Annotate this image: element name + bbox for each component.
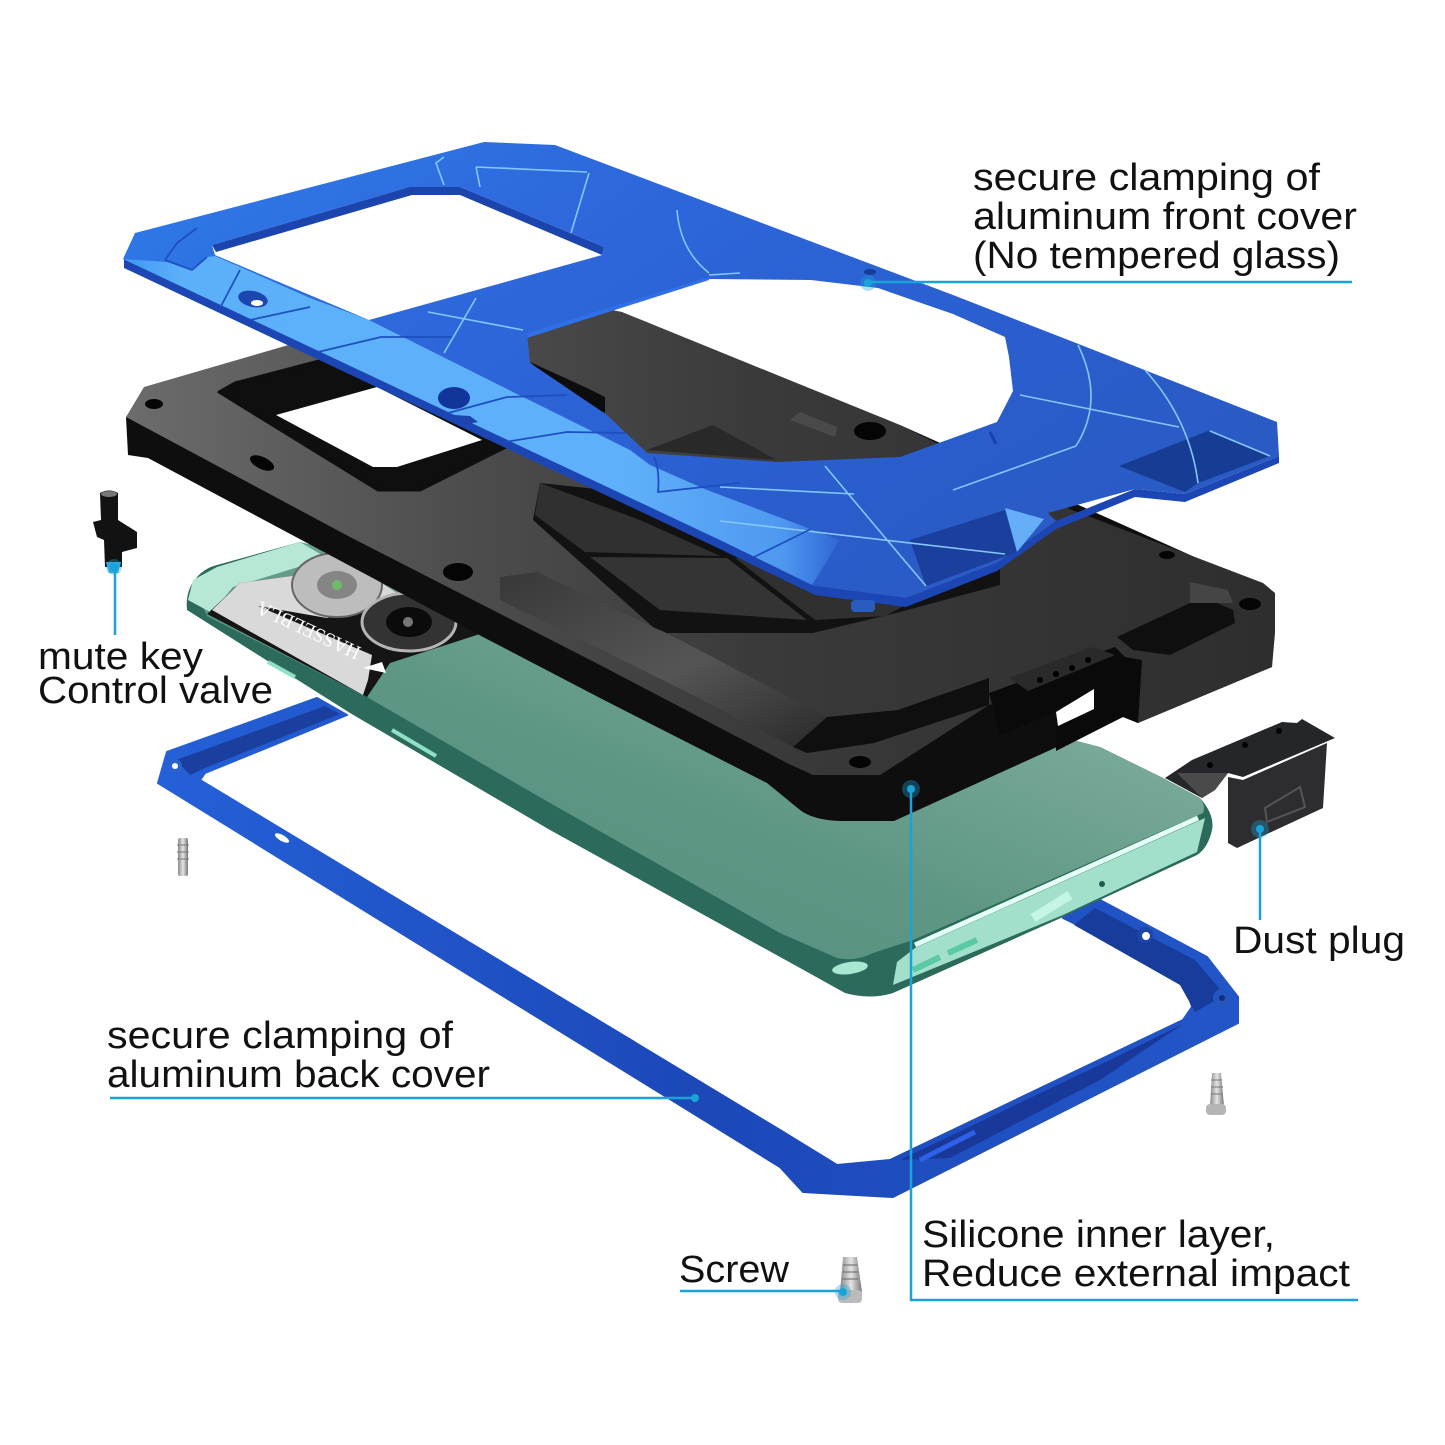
back aluminum frame bbox=[158, 698, 1238, 1197]
cover holes bbox=[237, 269, 996, 612]
lens 1 bbox=[292, 553, 382, 617]
screw left bbox=[177, 838, 189, 876]
callout: back cover bbox=[107, 1015, 699, 1102]
callout: silicone layer bbox=[902, 780, 1358, 1300]
callout: mute key bbox=[38, 559, 273, 712]
side buttons bbox=[268, 662, 1105, 970]
cover body bbox=[123, 142, 1279, 598]
light bevel band bbox=[123, 256, 840, 585]
lens 2 bbox=[362, 593, 456, 651]
blue aluminum front cover bbox=[123, 142, 1279, 612]
camera window frame bbox=[219, 345, 520, 490]
right lip bbox=[1117, 582, 1235, 655]
bevel lines bbox=[428, 157, 1270, 586]
inner wall of upper window bbox=[212, 187, 604, 255]
mute key part bbox=[93, 490, 137, 573]
screw right bbox=[1206, 1073, 1226, 1115]
dark and light facets bbox=[527, 277, 1270, 586]
screw bottom bbox=[838, 1257, 862, 1303]
camera window bbox=[276, 387, 482, 467]
case screw holes bbox=[145, 399, 1261, 768]
callout: front cover: secure clamping of bbox=[973, 157, 1320, 199]
callout: front cover: aluminum front cover bbox=[973, 196, 1357, 238]
phone bbox=[187, 542, 1213, 996]
cover side edge bbox=[124, 257, 1279, 607]
kickstand plate bbox=[533, 483, 1000, 633]
HASSELBLAD logo text: HASSELBLA bbox=[253, 596, 364, 663]
callout: dust plug: Dust plug bbox=[1233, 920, 1405, 962]
case top surface bbox=[126, 287, 1275, 775]
bottom lip bbox=[793, 678, 989, 753]
dust plug bbox=[1165, 719, 1335, 848]
callout: silicone layer: Reduce external impact bbox=[922, 1253, 1350, 1295]
callout: screw: Screw bbox=[679, 1249, 790, 1291]
black silicone case bbox=[126, 287, 1275, 821]
callout: mute key: Control valve bbox=[38, 670, 273, 712]
callout: back cover: secure clamping of bbox=[107, 1015, 453, 1057]
rim facet bbox=[500, 572, 827, 747]
callout: front cover: (No tempered glass) bbox=[973, 235, 1340, 277]
hole view details bbox=[530, 362, 837, 460]
callout: silicone layer: Silicone inner layer, bbox=[922, 1214, 1275, 1256]
callout: dust plug bbox=[1233, 820, 1405, 962]
callout: back cover: aluminum back cover bbox=[107, 1054, 490, 1096]
callout: front cover bbox=[860, 157, 1357, 291]
callout: screw bbox=[679, 1249, 851, 1300]
case underside bbox=[126, 417, 1275, 821]
camera strip bbox=[207, 553, 483, 697]
charging port opening bbox=[989, 647, 1142, 751]
callout: mute key: mute key bbox=[38, 636, 203, 678]
